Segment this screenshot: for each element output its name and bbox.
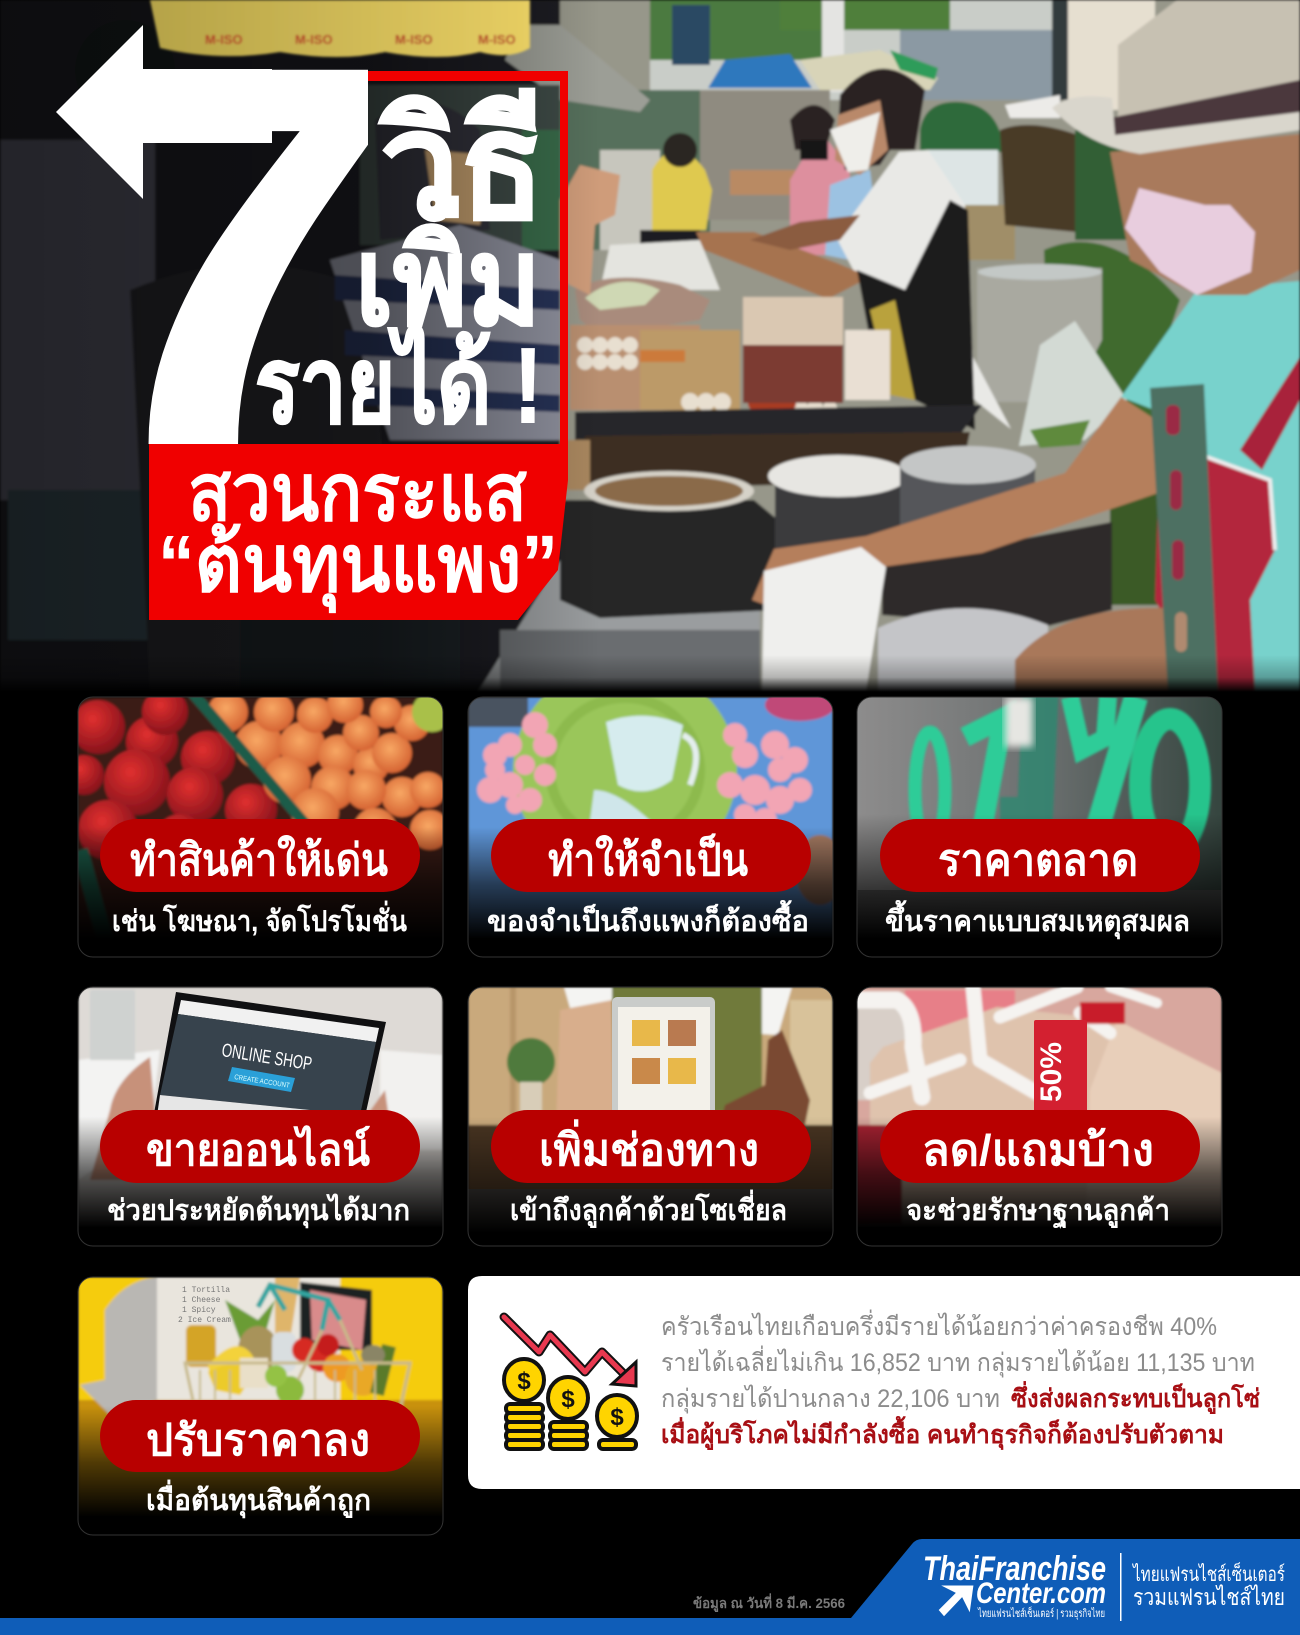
icon: falling arrow over coins: [504, 1317, 637, 1449]
title: big number 7 with left arrow: [56, 25, 368, 444]
logo: ThaiFranchise Center.com: ไทยแฟรนไชส์เซ็นเตอร์ | รวมธุรกิจไทย: [977, 1606, 1105, 1620]
card 1 pill: [100, 819, 420, 892]
card 4 photo: tablet online shop: [78, 987, 443, 1246]
panel text: รายได้เฉลี่ยไม่เกิน 16,852 บาท กลุ่มรายได้น้อย 11,135 บาท: [661, 1345, 1255, 1378]
info panel: [468, 1276, 1300, 1489]
card 5 caption: เข้าถึงลูกค้าด้วยโซเชี่ยล: [510, 1189, 787, 1228]
card 7 border: [78, 1277, 443, 1535]
card 2 border: [468, 697, 833, 957]
card 7 photo: grocery basket on yellow: 1 Cheese: [182, 1296, 221, 1305]
card 4 pill: ขายออนไลน์: [146, 1124, 370, 1175]
yellow umbrella: M-ISO: [295, 32, 333, 47]
card 2: ทำให้จำเป็น: [468, 696, 834, 958]
brand tagline: [1131, 1561, 1285, 1610]
card 2 pill: [491, 819, 811, 892]
card 3: ราคาตลาด: [857, 697, 1222, 957]
card 4: ขายออนไลน์: [78, 987, 443, 1246]
card 7 pill: ปรับราคาลง: [146, 1416, 370, 1465]
card 5 photo: tablet menu with apron: [468, 987, 833, 1246]
card 7 photo: grocery basket on yellow: 2 Ice Cream: [178, 1316, 231, 1325]
card 4 caption: ช่วยประหยัดต้นทุนได้มาก: [107, 1193, 410, 1228]
card 6 border: [857, 987, 1222, 1246]
title: วิธี เพิ่ม รายได้: วิธี: [378, 82, 545, 250]
title: วิธี เพิ่ม รายได้: รายได้ !: [255, 325, 542, 445]
logo: ThaiFranchise Center.com: [923, 1550, 1106, 1620]
icon: falling arrow over coins: $: [517, 1368, 531, 1395]
card 7 photo: grocery basket on yellow: 1 Tortilla: [182, 1286, 230, 1295]
card 5 border: [468, 987, 833, 1246]
yellow umbrella: [150, 0, 530, 57]
card 3 pill: [880, 819, 1200, 892]
card 4 border: [78, 987, 443, 1246]
panel text: ครัวเรือนไทยเกือบครึ่งมีรายได้น้อยกว่าค่าครองชีพ 40%: [661, 1309, 1217, 1341]
title: วิธี เพิ่ม รายได้: [255, 82, 545, 445]
card 3 caption: ขึ้นราคาแบบสมเหตุสมผล: [885, 899, 1190, 939]
card 1: ทำสินค้าให้เด่น: [64, 687, 452, 957]
panel text: กลุ่มรายได้ปานกลาง 22,106 บาท: [661, 1384, 1000, 1414]
panel text: [661, 1309, 1260, 1451]
title: วิธี เพิ่ม รายได้: เพิ่ม: [355, 196, 541, 350]
card 3 pill: ราคาตลาด: [938, 836, 1138, 885]
card 7 photo: grocery basket on yellow: [78, 1277, 443, 1535]
dark left part details: [505, 25, 650, 112]
card 7 pill: [100, 1400, 420, 1472]
card 3 photo: green market ticker: [858, 698, 1222, 928]
data date note: ข้อมูล ณ วันที่ 8 มี.ค. 2566: [693, 1593, 845, 1612]
card 1 border: [78, 697, 443, 957]
subtitle banner: สวนกระแส ต้นทุนแพง: สวนกระแส: [188, 448, 527, 537]
card 6 pill: ลด/แถมบ้าง: [922, 1126, 1154, 1175]
card 4 pill: [100, 1110, 420, 1183]
icon: falling arrow over coins: $: [561, 1386, 575, 1413]
logo: ThaiFranchise Center.com: Center.com: [976, 1577, 1106, 1610]
card 6 photo: sweaters with sale tag: 50%: [1035, 1042, 1068, 1102]
card 6 pill: [880, 1110, 1200, 1183]
card 4 photo: tablet online shop: ONLINE SHOP: [220, 1040, 313, 1075]
yellow umbrella: M-ISO: [395, 32, 433, 47]
card 1 photo: apples and oranges: [78, 698, 442, 926]
icon: falling arrow over coins: $: [610, 1404, 624, 1431]
card 1 caption: เช่น โฆษณา, จัดโปรโมชั่น: [112, 900, 407, 938]
card 5 pill: เพิ่มช่องทาง: [539, 1119, 759, 1175]
card 7 photo: grocery basket on yellow: 1 Spicy: [182, 1306, 216, 1315]
card 6 caption: จะช่วยรักษาฐานลูกค้า: [906, 1195, 1170, 1229]
card 5 pill: [491, 1110, 811, 1183]
card 5: เพิ่มช่องทาง: [468, 987, 833, 1246]
logo: ThaiFranchise Center.com: ThaiFranchise: [923, 1550, 1106, 1588]
card 2 pill: ทำให้จำเป็น: [548, 833, 748, 885]
yellow umbrella: M-ISO: [478, 32, 516, 47]
card 7 caption: เมื่อต้นทุนสินค้าถูก: [146, 1479, 371, 1518]
footer brand bar: [0, 1539, 1300, 1635]
card 6 photo: sweaters with sale tag: [858, 988, 1222, 1223]
panel text: เมื่อผู้บริโภคไม่มีกำลังซื้อ คนทำธุรกิจก็ต้องปรับตัวตาม: [661, 1415, 1224, 1451]
card 2 caption: ของจำเป็นถึงแพงก็ต้องซื้อ: [487, 899, 809, 938]
card 4 photo: tablet online shop: CREATE ACCOUNT: [234, 1074, 291, 1090]
card 3 border: [857, 697, 1222, 957]
card 1 pill: ทำสินค้าให้เด่น: [130, 834, 388, 885]
subtitle banner: สวนกระแส ต้นทุนแพง: “ต้นทุนแพง”: [158, 519, 558, 614]
panel text: ซึ่งส่งผลกระทบเป็นลูกโซ่: [1011, 1381, 1260, 1415]
hero photo: street food vendors: [0, 0, 1300, 692]
card 6: ลด/แถมบ้าง: [850, 987, 1222, 1246]
yellow umbrella: M-ISO: [205, 32, 243, 47]
card 2 photo: cups and flowers: [468, 698, 832, 934]
card 7: ปรับราคาลง: [78, 1277, 443, 1535]
red frame around title: [368, 71, 568, 444]
subtitle banner: สวนกระแส ต้นทุนแพง: [149, 444, 568, 620]
